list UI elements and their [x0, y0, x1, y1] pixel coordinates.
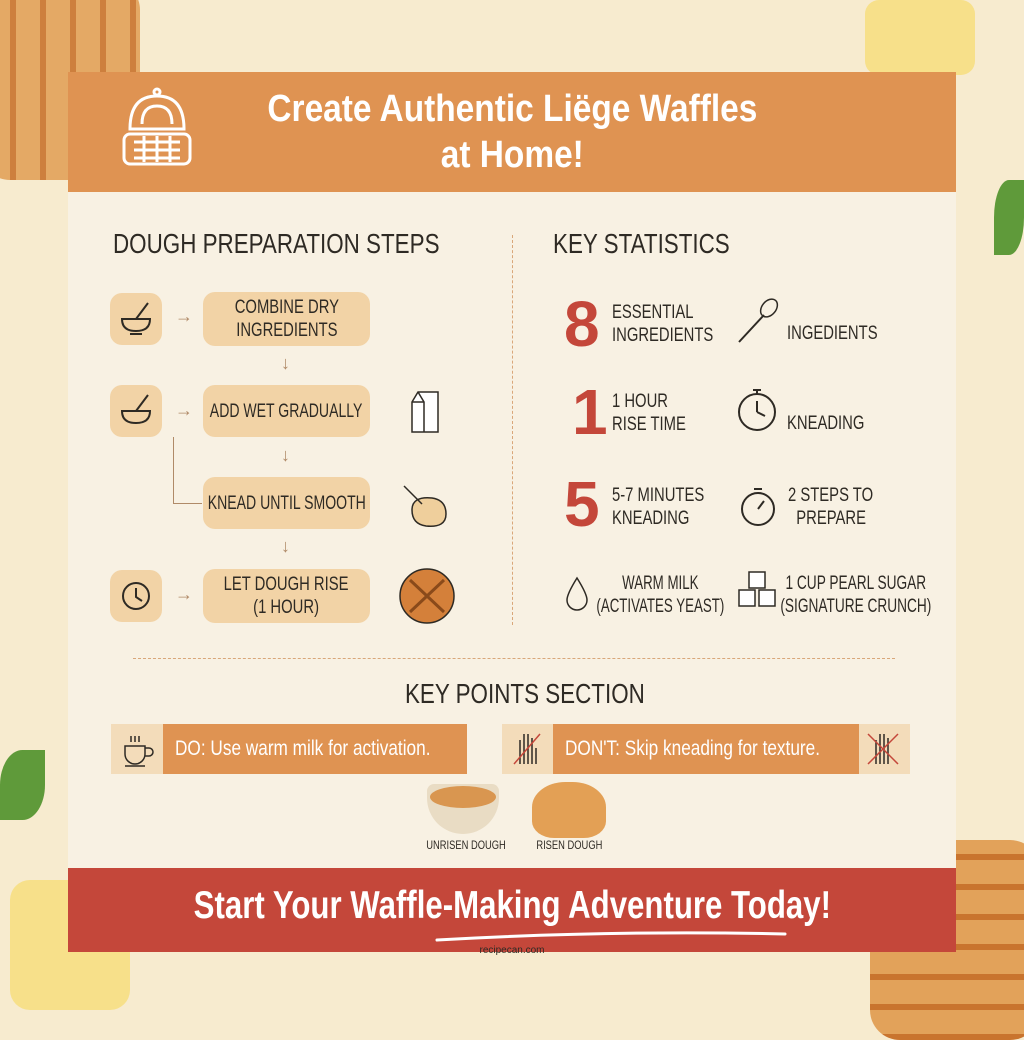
- stat: 2 steps: 2 STEPS TO: [788, 485, 873, 506]
- step box: add wet: ADD WET GRADUALLY: [210, 400, 363, 422]
- icon: sugar cubes: [738, 571, 776, 607]
- stat: warm milk: [596, 573, 724, 617]
- step box: knead: KNEAD UNTIL SMOOTH: [207, 492, 366, 514]
- credit text: recipecan.com: [479, 945, 545, 956]
- text: ↓: [281, 445, 290, 465]
- decorative waffle top-left: [0, 0, 140, 180]
- main body panel: [68, 192, 956, 868]
- image: risen dough: RISEN DOUGH: [536, 838, 603, 852]
- icon: crossed hand 2: [868, 734, 898, 764]
- heading: key points section: KEY POINTS SECTION: [405, 678, 645, 709]
- heading: key statistics: KEY STATISTICS: [553, 228, 730, 259]
- icon: kneading hand: [404, 486, 447, 527]
- text: →: [175, 306, 193, 326]
- stat: 1 hour: 1 HOUR: [612, 391, 668, 412]
- callout: don't: DON'T: Skip kneading for texture.: [565, 737, 820, 760]
- stat: 2 steps: [741, 485, 873, 529]
- icon: water drop: [566, 576, 588, 611]
- stat: 8 ingredients: ESSENTIAL: [612, 302, 694, 323]
- decorative butter bottom-left: [10, 880, 130, 1010]
- stat: 8 ingredients: 8: [564, 288, 600, 360]
- decorative waffle bottom-right: [870, 840, 1024, 1040]
- underline swoosh: [436, 931, 786, 942]
- leaf right: [994, 180, 1024, 255]
- stat: 8 ingredients: INGREDIENTS: [612, 325, 713, 346]
- stat: 1 hour: 1: [572, 376, 608, 448]
- step box: let dough rise: [203, 569, 370, 623]
- step box: combine dry: INGREDIENTS: [236, 320, 337, 341]
- callout: don't: [502, 724, 910, 774]
- image: risen dough: [532, 782, 606, 852]
- stat: spoon: [738, 298, 878, 344]
- stat: 1 hour: [572, 376, 686, 448]
- step box: let dough rise: LET DOUGH RISE: [224, 574, 349, 595]
- heading: dough preparation steps: DOUGH PREPARATION STEPS: [113, 228, 440, 259]
- footer banner: [68, 868, 956, 952]
- stat: pearl sugar: (SIGNATURE CRUNCH): [780, 596, 931, 617]
- text: →: [175, 400, 193, 420]
- step box: let dough rise: (1 HOUR): [254, 597, 319, 618]
- text: ↓: [281, 353, 290, 373]
- footer banner: Start Your Waffle-Making Adventure Today!: [193, 884, 831, 927]
- stat: 5-7 minutes: 5: [564, 468, 600, 540]
- icon: waffle: [399, 568, 455, 624]
- stat: warm milk: (ACTIVATES YEAST): [596, 596, 724, 617]
- horizontal divider: [133, 658, 895, 659]
- step box: add wet: [203, 385, 370, 437]
- vertical divider: [512, 235, 513, 625]
- step box: combine dry: [203, 292, 370, 346]
- icon: cup: [124, 736, 154, 767]
- stat: 1 hour: RISE TIME: [612, 414, 686, 435]
- stat: kneading timer: KNEADING: [787, 413, 864, 434]
- icon box: clock: [110, 570, 162, 622]
- callout: do: [111, 724, 467, 774]
- title: [267, 88, 757, 176]
- decorative butter top-right: [865, 0, 975, 75]
- stat: pearl sugar: [780, 573, 931, 617]
- stat: warm milk: WARM MILK: [622, 573, 698, 594]
- stat: 5-7 minutes: [564, 468, 704, 540]
- image: unrisen dough: UNRISEN DOUGH: [426, 838, 506, 852]
- step box: combine dry: COMBINE DRY: [234, 297, 339, 318]
- step box: knead: [203, 477, 370, 529]
- stat: 5-7 minutes: 5-7 MINUTES: [612, 485, 704, 506]
- text: ↓: [281, 536, 290, 556]
- icon: crossed hand: [514, 734, 540, 764]
- text: →: [175, 584, 193, 604]
- icon: waffle iron: [122, 88, 192, 166]
- icon box: bowl 1: [110, 293, 162, 345]
- header: [68, 72, 956, 192]
- stat: pearl sugar: 1 CUP PEARL SUGAR: [786, 573, 926, 594]
- icon: milk carton: [411, 391, 439, 433]
- title: at Home!: [440, 134, 584, 176]
- title: Create Authentic Liëge Waffles: [267, 88, 757, 130]
- callout: do: DO: Use warm milk for activation.: [175, 737, 430, 760]
- stat: 2 steps: PREPARE: [796, 508, 866, 529]
- stat: 5-7 minutes: KNEADING: [612, 508, 689, 529]
- image: unrisen dough: [426, 784, 506, 852]
- stat: 8 ingredients: [564, 288, 713, 360]
- icon box: bowl 2: [110, 385, 162, 437]
- stat: kneading timer: [738, 389, 864, 434]
- leaf left: [0, 750, 45, 820]
- stat: spoon: INGEDIENTS: [787, 323, 878, 344]
